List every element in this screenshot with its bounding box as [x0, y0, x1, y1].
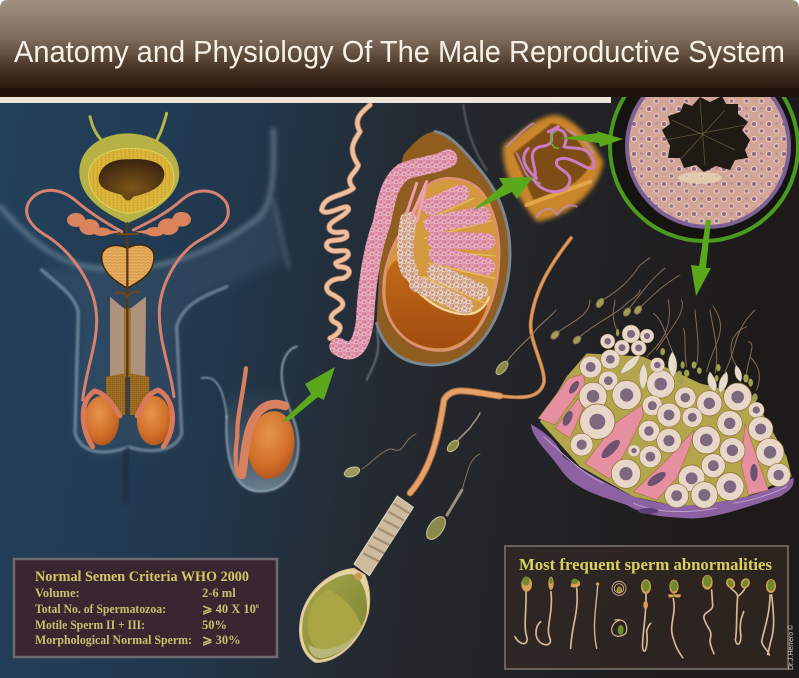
cytoplasmic droplet [668, 580, 683, 658]
germ cells [570, 325, 790, 508]
looped tail [612, 620, 627, 636]
dark orange lower region [386, 261, 489, 348]
arrow: cross-section to epithelium [691, 220, 711, 296]
green lens ring [608, 97, 799, 243]
criteria table: ⩾ 30% [202, 633, 241, 647]
sperm 4 [494, 310, 556, 377]
olive interstitial background [540, 353, 792, 508]
large head [515, 576, 532, 644]
sperm 5 [549, 300, 590, 341]
tunica grey rim [377, 132, 510, 365]
sperm 3 [445, 413, 480, 454]
criteria table: Motile Sperm II + III: [35, 618, 145, 632]
epididymis [242, 404, 285, 475]
sperm tails in the lumen [613, 300, 759, 390]
abnormal sperm drawings [515, 575, 776, 658]
Sertoli nuclei [561, 379, 758, 489]
sperm 2 [423, 454, 480, 543]
inner testis tissue [383, 178, 499, 351]
urogenital anatomy: front view [27, 113, 228, 447]
scrotum side view [202, 347, 299, 492]
head [299, 568, 370, 662]
criteria table: Total No. of Spermatozoa: [35, 602, 166, 616]
seminiferous tubule cross-section [608, 97, 799, 243]
coiled tail [612, 581, 626, 595]
panel: normal semen criteria [14, 559, 277, 657]
seminal vesicles [67, 212, 191, 236]
credit: Dr.J.Herrero © [787, 624, 795, 670]
green acrosome caps [616, 329, 758, 401]
small swimming sperm [343, 258, 680, 543]
seminiferous lobules [431, 193, 487, 267]
amorphous head [571, 579, 580, 648]
Sertoli cells [538, 374, 768, 500]
criteria table [35, 586, 259, 647]
criteria table: 6 [256, 604, 259, 610]
spermatid heads [620, 352, 742, 393]
arrow: tubule detail to cross-section [560, 131, 623, 147]
prostate [102, 245, 154, 288]
criteria table: 50% [202, 618, 227, 632]
criteria table: 2-6 ml [202, 586, 236, 600]
purple tubule loop [524, 127, 594, 192]
criteria table: ⩾ 40 X 10 [202, 602, 256, 616]
double head [724, 577, 752, 644]
arrow: scrotum to testis section [281, 367, 335, 422]
right testis [137, 390, 172, 447]
germinal epithelium [531, 300, 794, 518]
arrow: lobule to tubule detail [472, 177, 533, 211]
sperm 6 [572, 290, 640, 345]
sperm 8 [622, 268, 665, 317]
spermatic cord [236, 368, 246, 475]
narrow head [536, 577, 554, 645]
lumen pale sperm heads [678, 172, 722, 184]
criteria table: Volume: [35, 586, 80, 600]
sperm 9 [633, 275, 680, 315]
rete testis [405, 220, 410, 272]
inset: tubule loops detail [503, 115, 603, 222]
urethra [124, 223, 131, 413]
large sperm tail [410, 238, 571, 493]
cream strip left of lens [0, 97, 611, 103]
epididymis coil [338, 158, 448, 350]
lumen with tails [662, 96, 750, 172]
bent neck [702, 575, 714, 654]
large sperm [299, 496, 413, 662]
basement membrane [531, 424, 794, 518]
panel title: Normal Semen Criteria WHO 2000 [35, 569, 249, 585]
body silhouette: front view [0, 130, 288, 500]
midpiece [354, 496, 413, 576]
vas deferens [27, 190, 228, 400]
tissue disc [625, 97, 791, 229]
bladder [79, 133, 179, 223]
sperm 7 [595, 258, 650, 309]
testis [244, 408, 299, 482]
sperm 1 [343, 434, 416, 479]
header band [0, 0, 799, 97]
double midpiece [641, 579, 651, 651]
ureters [90, 113, 167, 143]
efferent duct wavy tubule [322, 105, 370, 338]
left testis [83, 391, 120, 447]
pinhead [594, 582, 599, 648]
lobule septa [423, 198, 495, 304]
panel: sperm abnormalities [505, 546, 788, 669]
penile shaft [106, 297, 149, 415]
panel heading: Most frequent sperm abnormalities [519, 555, 773, 574]
double tail [762, 579, 776, 655]
testis cross-section [322, 105, 510, 380]
tunica outer [377, 132, 510, 365]
criteria table: Morphological Normal Sperm: [35, 633, 192, 647]
